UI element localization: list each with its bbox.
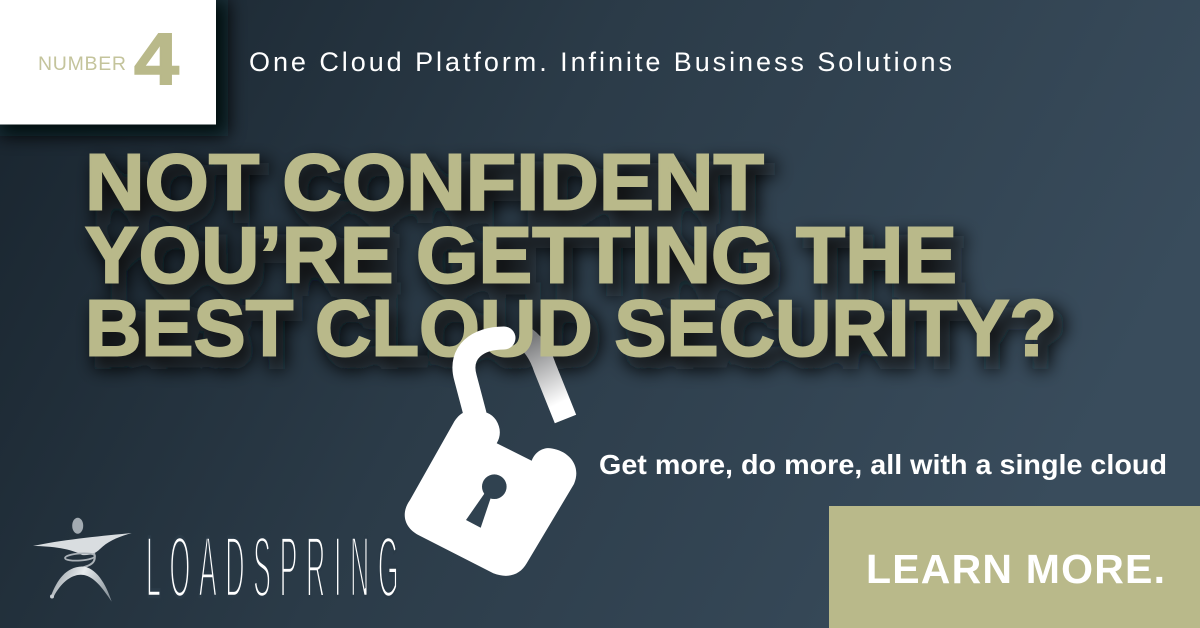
subheading: Get more, do more, all with a single cloud [599, 449, 1167, 480]
headline: NOT CONFIDENT [85, 138, 764, 226]
number badge: NUMBER [38, 53, 126, 75]
number badge: 4 [134, 20, 179, 100]
logo wordmark: LOADSPRING [146, 520, 399, 615]
headline shadow [92, 148, 1066, 384]
button: learn more: LEARN MORE. [866, 546, 1165, 592]
logo figure [33, 518, 132, 602]
tagline: One Cloud Platform. Infinite Business Solutions [249, 47, 952, 77]
headline [85, 138, 1057, 372]
button: learn more [829, 506, 1200, 628]
number badge shadow [0, 0, 228, 136]
headline shadow: YOU’RE GETTING THE [92, 221, 966, 311]
headline shadow: BEST CLOUD SECURITY? [92, 294, 1066, 384]
headline shadow: NOT CONFIDENT [92, 148, 773, 238]
number badge [0, 0, 216, 124]
headline: BEST CLOUD SECURITY? [85, 284, 1057, 372]
headline: YOU’RE GETTING THE [85, 210, 957, 300]
icon: open padlock [405, 338, 576, 576]
icon: open shackle far side [522, 336, 566, 419]
logo: LoadSpring [33, 518, 399, 615]
